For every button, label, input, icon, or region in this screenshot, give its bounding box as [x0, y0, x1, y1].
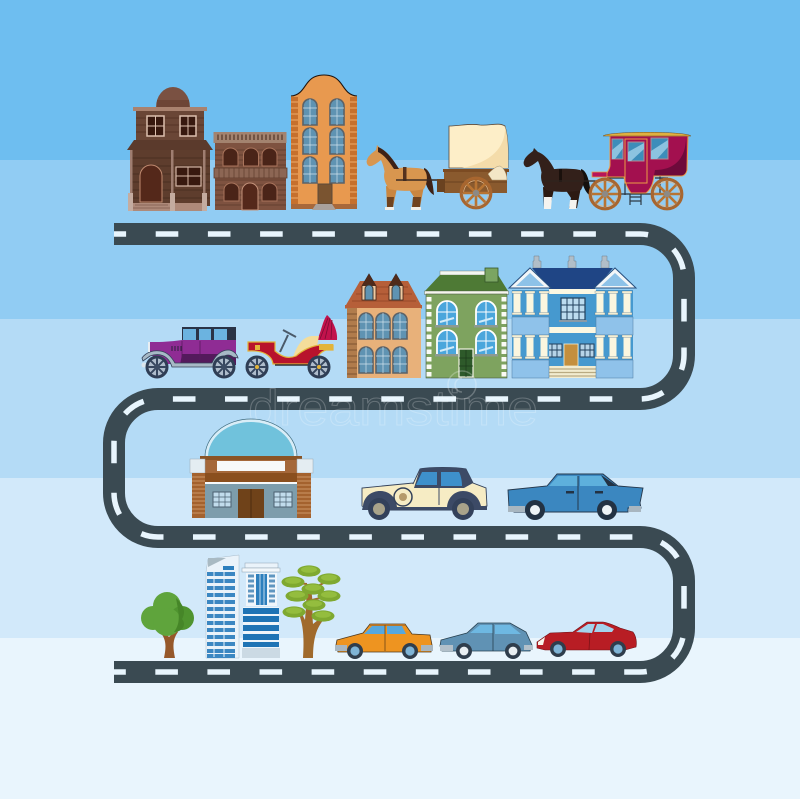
- tower: right: [242, 563, 280, 658]
- building: orange gabled tower: [291, 75, 357, 210]
- vintage car: red roadster: [247, 315, 337, 377]
- building: glass towers: [206, 555, 280, 658]
- modern car: steel blue hatchback: [440, 623, 533, 659]
- coach windows: [612, 139, 623, 159]
- tree: round green: [141, 592, 194, 658]
- left wing: [512, 290, 549, 317]
- coach roof: [603, 132, 691, 136]
- right wing: [596, 290, 633, 317]
- wagon canvas: [449, 124, 508, 168]
- centre block: [549, 289, 596, 378]
- icon: wheels: [525, 500, 545, 520]
- icon: wheels: [147, 357, 167, 377]
- classic car: blue sedan: [508, 474, 643, 520]
- icon: wheels: [550, 641, 566, 657]
- body: [248, 342, 333, 364]
- tree: bonsai style: [282, 565, 340, 658]
- tower: left: [206, 555, 239, 658]
- winding road: [114, 234, 684, 672]
- icon: tan horse: [367, 145, 434, 210]
- chimneys: [533, 256, 609, 268]
- horse and covered wagon: [367, 124, 509, 210]
- icon: wheels: [247, 357, 267, 377]
- building: peach townhouse: [345, 274, 422, 378]
- icon: wagon wheel: [461, 178, 491, 208]
- seat: [293, 336, 319, 358]
- vintage car: purple sedan: [142, 327, 238, 377]
- modern car: orange sedan: [335, 624, 433, 659]
- icon: dark horse: [524, 148, 600, 209]
- modern car: red coupe: [537, 622, 636, 657]
- wagon bed: [443, 169, 509, 172]
- coach body: [606, 136, 688, 193]
- harness pole: [396, 179, 460, 181]
- coach ladder: [630, 194, 641, 205]
- building: western saloon: [127, 87, 213, 211]
- sacks: [488, 166, 507, 180]
- columns: [512, 291, 522, 315]
- watermark: dreamstime: [248, 380, 538, 436]
- icon: wheels: [368, 498, 390, 520]
- horse and stagecoach: [524, 132, 691, 209]
- building: green townhouse: [424, 268, 508, 378]
- building: brown brick townhouse: [214, 132, 287, 210]
- roof: [532, 268, 613, 290]
- folded roof: [317, 315, 337, 340]
- dome: [205, 419, 297, 457]
- steering wheel: [280, 330, 296, 352]
- icon: wheels: [456, 643, 472, 659]
- icon: coach wheels: [590, 179, 620, 209]
- steps: [549, 366, 596, 378]
- coach undercarriage: [605, 176, 668, 195]
- classic car: cream limousine: [362, 468, 487, 520]
- building: blue mansion: [509, 256, 636, 378]
- icon: wheels: [347, 643, 363, 659]
- pediments: [509, 268, 551, 288]
- building: domed shop: [190, 419, 313, 518]
